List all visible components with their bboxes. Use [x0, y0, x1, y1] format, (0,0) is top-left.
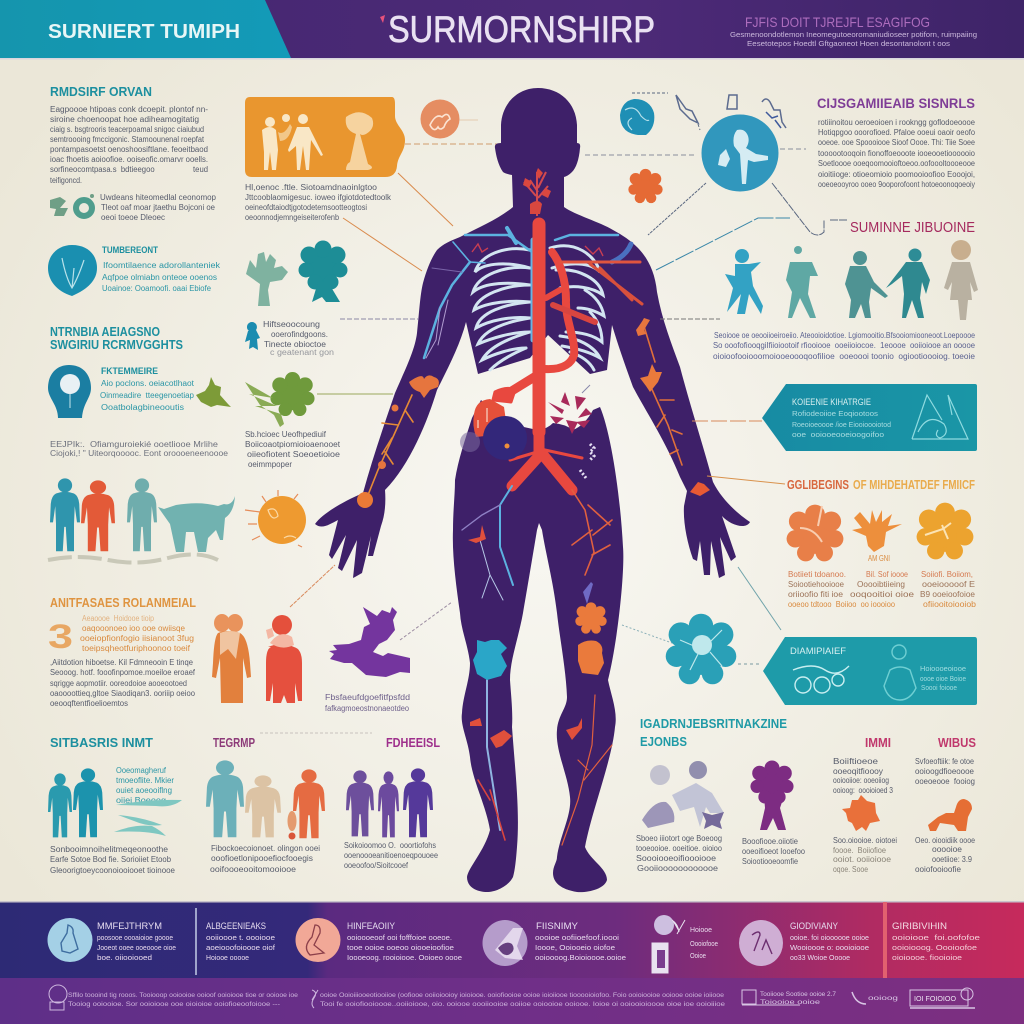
icon: green herb — [245, 372, 315, 427]
icons: three orange blooms — [787, 503, 973, 561]
panel: top right text: ooeoe. ooe Spoooiooe Sioof Oooe. Thi: Tiie Soee — [818, 138, 975, 147]
text: teal blob note: Uoainoe: Ooamoofi. oaai Ebiofe — [102, 284, 211, 293]
footer text — [68, 992, 725, 1008]
bottom item one: boe. oiiooiooed — [97, 953, 152, 962]
text: right mini columns bottom — [833, 836, 975, 874]
bottom item two: Hoiooe ooooe — [206, 953, 249, 962]
text: trio caption — [210, 844, 320, 874]
box two text: Hoioooeoiooe — [920, 664, 966, 673]
text: purple trio caption — [344, 841, 438, 870]
text: right mini columns top: ooiooiioe: ooeoiiog — [833, 776, 889, 785]
bottom icon stack: Hoiooe — [690, 925, 712, 934]
text: right mini columns top: ooeoqitfioooy — [833, 767, 883, 776]
text: lilac caption: tooeooioe. ooeitioe. oioioo — [636, 844, 723, 853]
panel: top right text: toooootooqoin fionoffoeooote iooeooetioooooio — [818, 149, 976, 158]
text: bloom captions: Bil. Sof ioooe — [866, 570, 908, 579]
text: small figure note — [245, 320, 334, 357]
text: bulb note: Oinmeadire tteegenoetiap — [100, 391, 195, 400]
text: grey note: sqrigge aopmotiir. ooreodoioe aooeootoed — [50, 679, 187, 688]
box two text: Soooi foiooe — [921, 683, 957, 692]
heading: orange section: ANITFASAES ROLANMEIAL — [50, 596, 196, 610]
bottom item four — [482, 920, 626, 966]
neck plant — [523, 168, 551, 216]
text: teal blob note — [102, 245, 220, 293]
heading: crimson section: SUMINNE JIBUOINE — [850, 220, 975, 236]
main title: SURMORNSHIRP — [388, 9, 655, 50]
panel: top-left text: Eagpoooe htipoas conk dcoepit. plontof nn- — [50, 105, 208, 114]
text: bloom captions: Ooooibtiieing — [857, 580, 905, 589]
figures: purple trio — [346, 768, 433, 837]
left leg vessels — [462, 486, 513, 840]
bottom item five: Wooioooe o: oooioiooe — [790, 943, 869, 952]
icon: orange number three: 3 — [48, 618, 73, 656]
icon: lilac shapes — [642, 761, 724, 829]
text: orange box caption: Jttcooblaomigesuc. ioweo ifgiotdotedtoolk — [245, 193, 391, 202]
bottom item six: GIRIBIVIHIN — [892, 921, 947, 931]
text: teal blob note: Ifoomtilaence adorollanteniek — [103, 261, 220, 270]
bottom item five: GIODIVIANY — [790, 921, 838, 931]
orange arm vessels — [368, 323, 682, 495]
text: orange note — [80, 614, 194, 653]
footer text: Tooiog ooiooioe. Sor ooioiooe ooe oioioioe ooiofioeoofoiooe --- — [68, 1001, 280, 1008]
text: small figure note: ooerofindgoons. — [271, 330, 328, 339]
header subtitle: Eesetotepos Hoedtl Gftgaoneot Hoen desontanolont t oos — [747, 39, 950, 48]
text: orange box caption — [245, 183, 391, 222]
header banner — [0, 0, 1024, 60]
text: herb note — [100, 193, 217, 222]
icon: purple bird — [329, 607, 410, 677]
bottom item six: ooioiooog. Oooioofoe — [892, 943, 977, 952]
figures: teal pair — [48, 768, 103, 837]
text: herb note: Tleot oaf moar jtaethu Bojconi oe — [101, 203, 215, 212]
text: frieze caption — [713, 331, 975, 361]
bottom item two: ALBGEENIEAKS — [206, 921, 266, 931]
text: frieze caption: Seoiooe oe oeooiioeiroeiio. Ateooioidotioe. Lgiomooitio.Bfsooiomiooneoot.Loepoooe — [714, 331, 975, 340]
ribcage — [473, 240, 604, 370]
text: grey note — [50, 658, 196, 708]
icon: teal blob — [48, 245, 97, 296]
text: right mini columns bottom: Soo.oiooioe. oiotoei — [833, 836, 897, 845]
header subtitle — [730, 14, 977, 48]
dark organ — [460, 416, 527, 460]
bottom item six: ooioiooe foi.oofofoe — [892, 933, 980, 942]
heading: teal section: SWGIRIU RCRMVGGHTS — [50, 338, 183, 352]
figures: five people frieze — [725, 240, 978, 320]
bottom item one: poosooe oooaioioe goooe — [97, 933, 173, 942]
text: herb caption: Boiicoaotpiomioioaenooet — [245, 440, 341, 449]
text: bloom captions: ofiiooitoiooiob — [923, 600, 977, 609]
bottom item six — [892, 921, 980, 962]
text: bloom captions: ooeoo tdtooo Boiioo oo ioooioo — [788, 600, 896, 609]
text: right mini columns bottom: ooooioe — [932, 845, 962, 854]
footer text: Sffilo toooind tig rooos. Tooiooop ooiooioe ooioof ooioiooe tioe or ooiooe ioe — [68, 992, 298, 999]
text: teal note with waves: Ooeomagheruf — [116, 766, 167, 775]
box two swirls icon — [793, 666, 849, 693]
header subtitle: Gesmenoondotlemon Ineomegutoeoromaniudioseer potiforn, ruimpaiing — [730, 30, 977, 39]
panel: teal arrow box two — [763, 637, 977, 705]
text: left grey note: Ciojoki,! " Uiteorqooooc. Eont oroooeneenoooe — [50, 449, 228, 458]
panel: top-left text: semtroooing fmccigonic. Stamoounenal roepfat — [50, 135, 205, 144]
decorative ground — [48, 554, 218, 563]
bottom item three: HINFEAOIIY — [347, 921, 395, 931]
heading: center-left: TEGRMP — [213, 736, 255, 750]
bottom item one: MMFEJTHRYM — [97, 921, 162, 931]
bottom item three — [296, 918, 462, 962]
panel: top-left text: pontampasoetst oenoshoosiftlane. feoeitbaod — [50, 145, 208, 154]
footer right badges: IOI FOIOIOO — [914, 994, 956, 1003]
text: bloom captions: Soiiofi. Boiiom, — [921, 570, 973, 579]
bottom item two: aoeiooofoioooe oiof — [206, 943, 275, 952]
text: purple tree caption — [742, 837, 806, 866]
panel: top right text: oioitiioge: otioeomioio poomooioofioo Eooojoi, — [818, 170, 975, 179]
text: right mini columns top: Boiiftioeoe — [833, 757, 878, 766]
text: purple trio caption: Soikoioomoo O. ooortiofohs — [344, 841, 436, 850]
icon: orange animal — [928, 799, 972, 831]
panel: upper right icon cluster — [585, 93, 848, 319]
icon: teal tree — [298, 240, 348, 302]
text: orange note: toeipsqheotfuriphoonoo toeif — [82, 644, 191, 653]
text: right mini columns bottom: foooe. Boiiofioe — [833, 846, 886, 855]
text: trio caption: ooifoooeooitomooiooe — [210, 865, 296, 874]
left banner title: SURNIERT TUMIPH — [48, 21, 240, 43]
text: right mini columns top: ooioogdfioeoooe — [915, 767, 974, 776]
icon: green tree — [246, 252, 288, 306]
text: grey note: oeooqftentfioelioemtos — [50, 699, 128, 708]
text: right mini columns top: ooioog: oooioioed 3 — [833, 786, 893, 795]
icon: orange flower — [628, 169, 663, 203]
text: bloom captions: ooqooitioi oioe — [850, 590, 914, 599]
heading: lower-left teal: SITBASRIS INMT — [50, 735, 153, 750]
bottom item four: oooioe oofiioefoof.ioooi — [535, 933, 619, 942]
heading: lower-right teal: EJONBS — [640, 734, 687, 749]
text: purple tree caption: Booofiooe.oiiotie — [742, 837, 798, 846]
text: herb caption: Sb.hcioec Ueofhpediuif — [245, 430, 327, 439]
panel: top-left text: teifigoncd. — [50, 176, 82, 185]
left leg reds — [468, 525, 512, 748]
heading: orange right — [787, 477, 975, 492]
header subtitle: FJFIS DOIT TJREJFL ESAGIFOG — [745, 14, 930, 30]
box one icon — [912, 395, 968, 439]
text: bulb note — [100, 366, 195, 412]
box one text — [792, 409, 891, 439]
footer right badges — [742, 988, 975, 1008]
text: bird caption: Fbsfaeufdgoefitfpsfdd — [325, 693, 410, 702]
text: teal pair caption: Earfe Sotoe Bod fie. Sorioiiet Etoob — [50, 855, 172, 864]
panel: top right text: rotiiinoitou oeroeoioen i rookngg goflodoeoooe — [818, 118, 975, 127]
text: teal pair caption: Gleoorigtoeycoonoiooiooet tioinooe — [50, 866, 175, 875]
icon: sun — [245, 490, 306, 547]
right leg flowers — [566, 602, 607, 740]
panel: top right text: CIJSGAMIIEAIB SISNRLS — [817, 96, 975, 111]
bottom band — [0, 901, 1024, 978]
text: right mini columns bottom: oqoe. Sooe — [833, 865, 868, 874]
heading: teal section — [50, 325, 183, 352]
text: grey note: Seooog. hotf. fooofinpomoe.moeiloe eroaef — [50, 668, 196, 677]
red aorta and arteries — [493, 224, 642, 490]
text: purple trio caption: ooenoooeanitioenoeqpouoee — [344, 851, 438, 860]
text: teal note with waves: tmoeoflite. Mkier — [116, 776, 174, 785]
right leg vessels — [562, 490, 612, 845]
text: right mini columns bottom: ooiofooioofie — [915, 865, 961, 874]
bottom item five: oo33 Woioe Ooooe — [790, 953, 850, 962]
text: small figure note: Tinecte obioctoe — [264, 340, 326, 349]
text: teal pair caption — [50, 845, 175, 875]
text: frieze caption: So ooofofiooqgiIfiioiootoif rfiooiooe ooeiioiocoe. 1eoooe ooiioiooe an ooooe — [713, 341, 975, 350]
text: bloom captions: oriioofio fiti ioe — [788, 590, 843, 599]
bottom item one: Jooeot ooee ooeoooe oioe — [97, 943, 176, 952]
panel: top right text: Hotiqpgoo ooorofioed. Pfaloe ooeui oaoir oeofo — [818, 128, 976, 137]
icon: green leaf — [196, 377, 231, 407]
text: lilac caption — [636, 834, 723, 873]
panel: top-left text: siroine choenoopat hoe adiheamogitatig — [50, 115, 199, 124]
bottom icon stack: Oooiofooe — [690, 939, 718, 948]
footer mid icon — [312, 990, 318, 1008]
box two jar icon — [884, 645, 916, 700]
panel: top-left text: ioac fhoetis aoioofioe. ooiseofic.omarvr ooells. — [50, 155, 208, 164]
panel: top right text: ooeoeooyroo ooeo 9ooporofoont hotoeoonoqoeoiy — [818, 180, 975, 189]
text: right mini columns top — [833, 757, 975, 795]
icon: bulb — [48, 365, 91, 418]
text: right mini columns top: ooeoeooe fooiog — [915, 777, 975, 786]
icon: green herb and ring — [50, 194, 94, 216]
text: teal note with waves — [114, 766, 182, 836]
panel: top-left text: ciaig s. bsgtrooris teacerpoamal snigoc ciaiubud — [50, 125, 204, 134]
dancer — [725, 249, 763, 314]
icon: exclamation — [288, 811, 296, 840]
box two heading: DIAMIPIAIEF — [790, 646, 846, 657]
panel: teal arrow box one — [762, 384, 977, 451]
text: lilac caption: Sboeo iiiotort oge Boeoog — [636, 834, 722, 843]
connector lines: right cluster — [585, 93, 848, 319]
arm flowers — [357, 318, 710, 508]
bottom icon stack — [652, 915, 718, 973]
icon: salmon circle — [420, 100, 460, 138]
white speckles — [580, 444, 594, 478]
bottom item five: ooioe. foi oioooooe ooioe — [790, 933, 869, 942]
icon: teal flower burst — [666, 614, 736, 684]
text: right mini columns bottom: ooiot. ooiioiooe — [833, 855, 891, 864]
panel: top-left text: RMDSIRF ORVAN — [50, 84, 152, 99]
bottom item two: ooiioooe t. oooiooe — [206, 933, 275, 942]
text: orange note: Aeaoooe Hoidooe tioip — [82, 614, 155, 623]
text: teal pair caption: Sonbooimnoihelitmeqeonoothe — [50, 845, 168, 854]
text: purple tree caption: Soiootiooeoomfie — [742, 857, 798, 866]
orange box figures — [262, 112, 373, 170]
text: teal blob note: TUMBEREONT — [102, 245, 158, 255]
footer right badges: Tooiiooe Sootioe ooioe 2.7 — [760, 992, 837, 998]
text: trio caption: Fibockoecoionoet. olingon ooei — [211, 844, 320, 853]
red organ — [473, 399, 506, 437]
text: herb caption: oiieofiotent Soeoetioioe — [247, 450, 340, 459]
bottom item three: tooe ooioe ooeoo oiooeioofioe — [347, 943, 454, 952]
human body figure — [315, 88, 750, 892]
icon: purple tree — [750, 760, 794, 830]
box two text — [920, 664, 966, 692]
panel: top right text: Soetloooe ooeqoomooioftoeoo.oofoooltoooeooe — [818, 159, 975, 168]
text: herb caption: oeimmpoper — [248, 460, 292, 469]
heading: crimson pair: WIBUS — [938, 735, 976, 750]
holding hands figures — [845, 248, 930, 318]
box one text: Roeoioeoooe /ioe Eiooioooiotod — [792, 420, 891, 429]
heading: orange right: OF MIHDEHATDEF FMIICF — [853, 477, 975, 492]
icon: orange flower small — [842, 795, 880, 831]
connector lines: left of figure — [260, 120, 500, 733]
right leg purple wedge — [583, 582, 593, 604]
text: lilac caption: Soooiooeoifioooiooe — [636, 854, 716, 863]
text: orange box caption: Hl,oenoc .ftle. Siotoamdnaoinlgtoo — [245, 183, 378, 192]
bottom item one — [48, 918, 176, 962]
bottom item five — [739, 920, 869, 966]
text: frieze caption: oioioofooiooomoiooeoooqoofiIioe ooeoooi toonio ogiootioooiog. toeoie — [713, 352, 975, 361]
panel: top right text — [817, 96, 976, 189]
bottom item four: FIISNIMY — [536, 921, 578, 931]
text: herb note: Uwdeans hiteomedlal ceonomop — [100, 193, 217, 202]
text: trio caption: ooofioetlonipooefiocfooegis — [211, 854, 313, 863]
text: bird caption: fafkagmoeostnonaeotdeo — [325, 704, 410, 713]
shoulder branches — [472, 244, 603, 256]
heading: crimson pair — [865, 735, 976, 750]
footer band — [0, 978, 1024, 1024]
box one text: Rofiodeoiioe Eoqiootoos — [792, 409, 878, 418]
footer text: Tooi fe ooiofiooioooe..ooiioiooe, oio. ooiooe oooiiooioe ooiioe ooiooioe ooiooe. Ioioe oi ooiooioioooe oioe ioe ooioiiioe — [320, 1001, 725, 1008]
blue veins left arm and shoulder — [424, 228, 631, 358]
icon: teal round organ — [620, 99, 654, 135]
text: orange box caption: oeineofdtaiodtjgotodetemsootteogtosi — [245, 203, 367, 212]
box one heading: KOIEENIE KIHATRGIE — [792, 397, 871, 408]
heading: teal section: NTRNBIA AEIAGSNO — [50, 325, 160, 339]
text: teal note with waves: oiiei Boeoog — [116, 796, 166, 805]
box one text: ooe ooiooeooeioogoifoo — [792, 430, 884, 439]
heading: orange right: GGLIBEGINS — [787, 477, 849, 492]
text: bulb note: FKTEMMEIRE — [101, 366, 158, 376]
text: purple tree caption: ooeoifioeot Iooefoo — [742, 847, 806, 856]
panel: top-left text — [50, 84, 208, 185]
text: herb note: oeoi toeoe Dleoec — [101, 213, 165, 222]
text: bloom captions: B9 ooeioofoioe — [920, 590, 975, 599]
text: bloom captions: Soiootiehooiooe — [788, 580, 844, 589]
text: bloom captions: ooeiooooof E — [922, 580, 975, 589]
footer text: ooioe Ooioiiiooeotiooiioe (oofiooe ooiioiooioy ioioiooe. ooiofiooioe ooioe ioioiiooe tiooooioiofoo. Foio ooioiooioe ooiooe ooioe ioiiooe — [320, 992, 724, 999]
text: teal blob note: Aqfpoe olmiabn onteoe ooenos — [102, 273, 217, 282]
bottom item three: ooioooeoof ooi fofffoioe ooeoe. — [347, 933, 452, 942]
text: small figure note: c geatenant gon — [270, 348, 334, 357]
figures: orange and red people — [212, 614, 302, 703]
bottom item two — [206, 921, 275, 962]
footer left icon — [49, 985, 67, 1010]
text: small figure note: Hiftseoocoung — [263, 320, 320, 329]
walking figure — [786, 246, 818, 318]
text: bulb note: Aio poclons. oeiacotlhaot — [101, 379, 195, 388]
bottom item four: ooioooog.Boioioooe.ooioe — [535, 953, 626, 962]
bottom item four: Ioooe, Ooiooeio oiofoe — [535, 943, 615, 952]
text: grey note: oaoooottieq,gltoe Siaodiqan3. ooriiip oeioo — [50, 689, 196, 698]
footer right badges: Toiooioe ooioe — [760, 1000, 821, 1006]
text: orange note: oaqooonoeo ioo ooe owiisqe — [82, 624, 185, 633]
body silhouette — [315, 88, 750, 578]
text: orange note: ooeiopfionfogio iisianoot 3fug — [80, 634, 194, 643]
text: bird caption — [325, 693, 410, 713]
icon: large teal circle — [702, 114, 778, 192]
text: herb caption — [245, 430, 341, 469]
icon: bull — [158, 496, 235, 552]
text: bloom captions — [788, 554, 977, 609]
box two text: oooe oioe Boioe — [920, 674, 966, 683]
figures: people and bull — [48, 478, 235, 563]
connectors: right arm — [622, 421, 785, 664]
text: bloom captions: Botiieti tdoanoo. — [788, 570, 846, 579]
panel: top-left text: sorfineocomtpasa.s bdtieegoo teud — [50, 165, 208, 174]
text: right mini columns bottom: ooetiioe: 3.9 — [932, 855, 972, 864]
text: right mini columns bottom: Oeo. oiooidiik oooe — [915, 836, 975, 845]
text: teal note with waves: ouiet aoeooiflng — [116, 786, 172, 795]
text: bloom captions: AM GNI — [868, 554, 890, 563]
bottom icon stack: Ooioe — [690, 951, 706, 960]
text: left grey note — [50, 440, 228, 458]
text: left grey note: EEJPIk:. Ofiamguroiekié ooetliooe Mrlihe — [50, 440, 218, 449]
figures: mixed trio — [206, 760, 325, 840]
heading: purple people: FDHEEISL — [386, 735, 440, 750]
heading: lower-right teal: IGADRNJEBSRITNAKZINE — [640, 716, 787, 731]
text: bulb note: Ooatbolagbineooutis — [101, 403, 184, 412]
crimson leaves flower — [548, 385, 592, 434]
bottom item three: Ioooeoog. rooioiooe. Ooioeo oooe — [347, 953, 462, 962]
footer right badges: ooioog — [868, 996, 898, 1002]
icon: small sketches — [676, 95, 786, 128]
text: purple trio caption: ooeoofoo/Sioitcooef — [344, 861, 409, 870]
text: grey note: ,Aiitdotion hiboetse. Kil Fdmneooin E tinqe — [50, 658, 193, 667]
text: right mini columns top: Svfoeoftiik: fe otoe — [915, 757, 974, 766]
left leg blue flower — [473, 640, 507, 680]
panel: orange illustration box — [245, 97, 405, 177]
bottom item six: oioioooe. fiooioioe — [892, 953, 962, 962]
text: orange box caption: oeoonnodjemngeiseiterofenb — [245, 213, 340, 222]
text: lilac caption: Gooiioooooooooooe — [637, 864, 718, 873]
taupe figure — [944, 240, 978, 320]
heading: lower-right teal — [640, 716, 787, 749]
heading: crimson pair: IMMI — [865, 735, 891, 750]
